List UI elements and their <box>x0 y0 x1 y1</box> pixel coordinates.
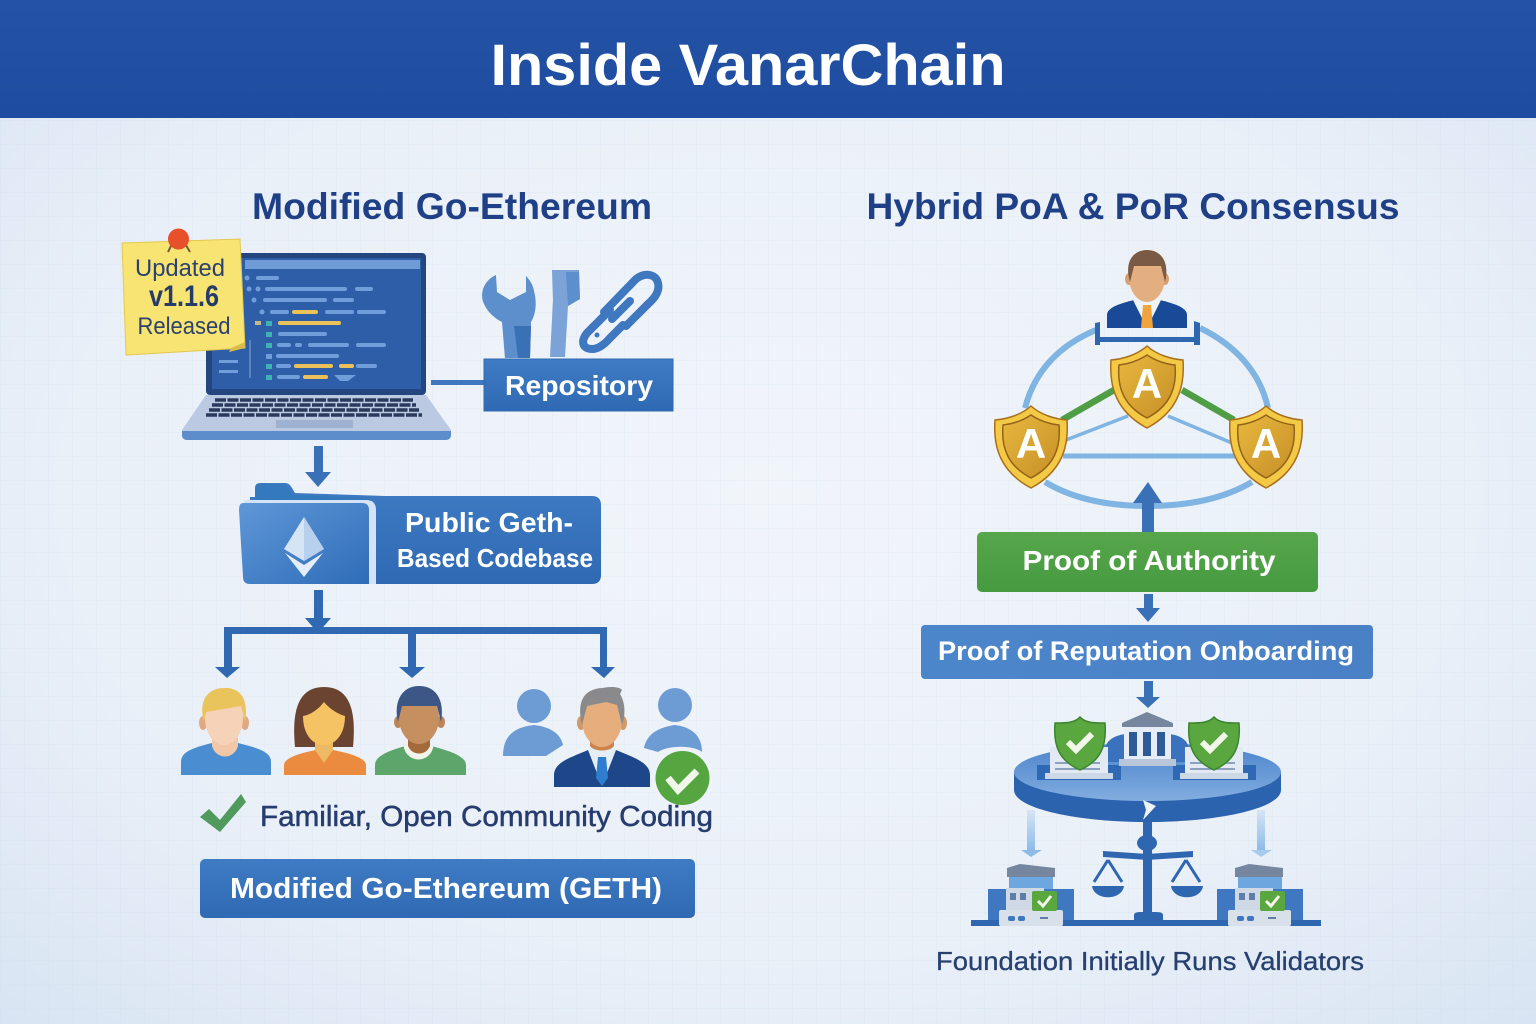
icon: balance scale <box>971 822 1321 926</box>
title: Inside VanarChain <box>490 33 1006 98</box>
arrow: branching tree to community <box>215 590 615 678</box>
icon: blue silhouette right <box>644 688 702 752</box>
folder: Public Geth-Based Codebase <box>239 483 601 584</box>
sticky note: Updated v1.1.6 Released: Updated <box>135 255 225 282</box>
icon: tools (wrench, screwdriver, link) <box>482 270 658 358</box>
box: Proof of Reputation Onboarding: Proof of Reputation Onboarding <box>938 636 1354 666</box>
icon: man in suit <box>554 687 650 787</box>
box: Repository <box>484 359 673 411</box>
icon: green check badge <box>652 747 714 809</box>
text: Familiar, Open Community Coding: Familiar, Open Community Coding <box>260 801 713 833</box>
icon: blue silhouette left <box>503 689 563 756</box>
icon: shield left: A <box>1016 420 1046 467</box>
icon: shield right <box>1230 406 1302 488</box>
icon: shield left <box>995 406 1067 488</box>
connector: laptop to repository <box>431 380 484 385</box>
icon: validator node right <box>1217 864 1303 926</box>
icon: person green shirt <box>375 686 466 775</box>
arrow: authority to reputation <box>1136 594 1160 622</box>
arrow: laptop to codebase <box>305 446 331 487</box>
arrow: pale left <box>1021 810 1042 857</box>
icon: shield center: A <box>1132 360 1162 407</box>
icon: authority network <box>995 328 1302 506</box>
icon: laptop with code <box>182 253 451 440</box>
icon: validator node left <box>988 864 1074 926</box>
arrow: up to authority network <box>1133 482 1162 532</box>
folder: Public Geth-Based Codebase: Public Geth- <box>405 507 573 538</box>
box: Proof of Authority <box>977 532 1318 592</box>
icon: check mark <box>200 794 246 832</box>
icon: shield check left <box>1055 717 1105 770</box>
icon: foundation platform <box>1014 712 1281 822</box>
sticky note: Updated v1.1.6 Released <box>122 228 245 355</box>
icon: authority person on bracket <box>1095 250 1200 345</box>
header band <box>0 0 1536 118</box>
box: Modified Go-Ethereum (GETH) <box>200 859 695 918</box>
sticky note: Updated v1.1.6 Released: v1.1.6 <box>149 280 219 313</box>
box: Proof of Reputation Onboarding <box>921 625 1373 679</box>
folder: Public Geth-Based Codebase: Based Codebase <box>397 543 593 573</box>
icon: document left <box>1045 747 1113 779</box>
icon: document right <box>1180 747 1248 779</box>
icon: shield center <box>1111 346 1183 428</box>
box: Modified Go-Ethereum (GETH): Modified Go-Ethereum (GETH) <box>230 873 662 905</box>
text: Foundation Initially Runs Validators: Foundation Initially Runs Validators <box>936 946 1364 976</box>
box: Repository: Repository <box>505 370 653 401</box>
icon: shield check right <box>1189 717 1239 770</box>
heading: Modified Go-Ethereum: Modified Go-Ethereum <box>252 186 652 227</box>
icon: person blond <box>181 688 271 775</box>
icon: shield right: A <box>1251 420 1281 467</box>
arrow: pale right <box>1251 810 1272 857</box>
icon: person woman <box>284 687 366 775</box>
sticky note: Updated v1.1.6 Released: Released <box>138 313 230 340</box>
icon: red pin <box>168 228 190 252</box>
icon: temple <box>1119 712 1176 766</box>
icon: ethereum diamond <box>284 517 324 577</box>
box: Proof of Authority: Proof of Authority <box>1022 545 1276 576</box>
arrow: reputation to foundation <box>1136 681 1160 708</box>
heading: Hybrid PoA & PoR Consensus: Hybrid PoA & PoR Consensus <box>866 186 1400 227</box>
